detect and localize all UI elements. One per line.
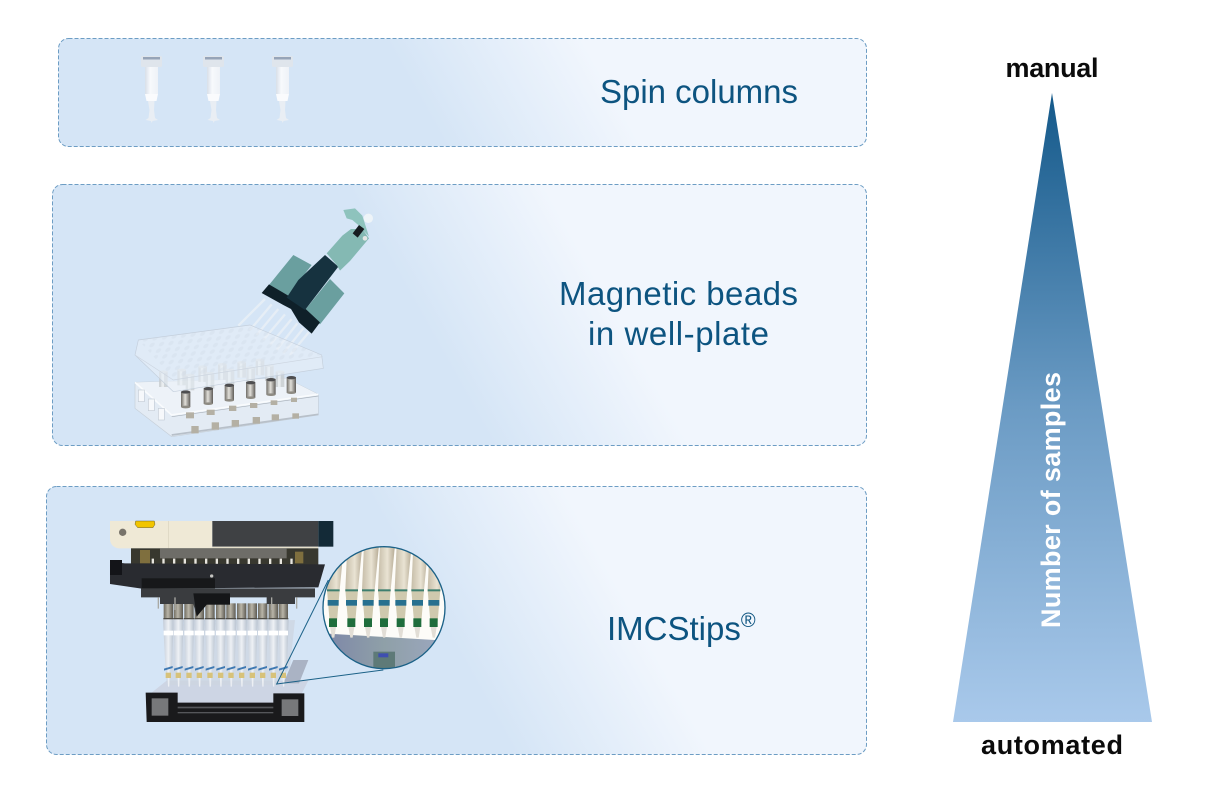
pipette <box>262 208 373 334</box>
instrument black head <box>110 562 325 589</box>
magnified circle <box>323 545 446 670</box>
panel: IMCStips <box>46 486 866 754</box>
head mounts <box>141 588 315 617</box>
panel background <box>46 486 866 754</box>
tip array <box>163 603 289 687</box>
pipette grip <box>327 229 369 271</box>
label: magnetic beads in well-plate: in well-plate <box>588 315 769 352</box>
label: magnetic beads in well-plate: Magnetic beads <box>559 275 798 312</box>
pipette top hook <box>343 208 369 237</box>
icon: spin column 2 <box>203 56 224 123</box>
magnet block <box>135 378 318 437</box>
panel background <box>58 38 866 146</box>
mount rods <box>158 597 297 610</box>
black plate carrier <box>146 693 304 722</box>
pipette body left <box>269 255 312 296</box>
scale: number of samples <box>953 53 1152 760</box>
ghost magnets <box>159 359 284 390</box>
well plate <box>135 325 323 392</box>
icon: spin column 1 <box>141 56 162 123</box>
magnet block top surface <box>135 378 318 415</box>
callout lines <box>277 580 383 684</box>
pipette handle <box>287 255 338 310</box>
well plate in carrier <box>152 681 308 707</box>
side button <box>363 236 367 241</box>
pipette body right <box>305 279 344 324</box>
panel: magnetic beads in well-plate <box>52 184 866 446</box>
translucent tips backdrop <box>163 620 295 685</box>
triangle <box>953 93 1152 722</box>
panel: spin columns <box>58 38 866 146</box>
label: manual: manual <box>1006 53 1098 83</box>
pipette tips <box>238 299 309 355</box>
magnets <box>181 376 296 408</box>
label: automated: automated <box>981 730 1123 760</box>
label: IMCStips: ® <box>741 610 756 632</box>
block holes <box>186 398 299 433</box>
illustration: automated liquid handler with magnified tips <box>110 521 446 722</box>
triangle label: Number of samples <box>1036 372 1066 628</box>
warning label <box>135 521 155 528</box>
pipette display <box>353 225 364 238</box>
instrument cream housing <box>110 521 212 548</box>
plate stack at right <box>283 660 308 683</box>
magnet block and well plate <box>135 325 323 437</box>
housing screw <box>119 529 126 536</box>
icon: spin column 3 <box>272 56 293 123</box>
instrument mechanism <box>131 548 318 565</box>
pipette black base <box>262 284 320 334</box>
panel background <box>52 184 866 446</box>
instrument dark housing <box>212 521 318 547</box>
label: IMCStips: IMCStips <box>607 610 741 647</box>
label: spin columns: Spin columns <box>600 73 798 110</box>
block left cells <box>138 390 164 420</box>
label: magnetic beads in well-plate <box>559 275 798 352</box>
plunger <box>364 214 373 223</box>
